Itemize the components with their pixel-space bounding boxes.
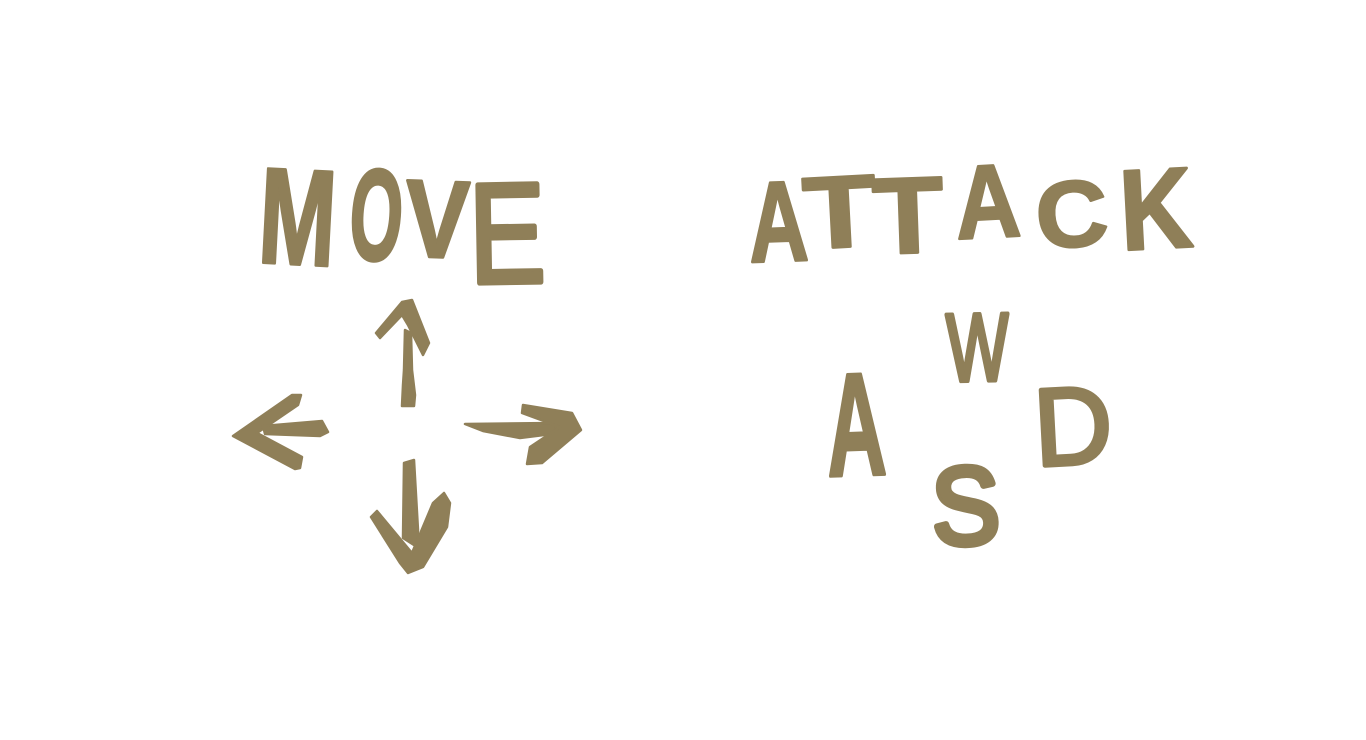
heading: ATTACK: T (871, 154, 946, 277)
heading: ATTACK: A (952, 142, 1023, 261)
heading: MOVE: E (468, 154, 547, 314)
key label: D: D (1031, 363, 1115, 490)
heading: MOVE (255, 139, 547, 314)
icon: down arrow (371, 460, 450, 573)
heading: MOVE: V (403, 157, 472, 282)
key label: S: S (930, 444, 1002, 569)
icon: up arrow (376, 300, 429, 406)
heading: ATTACK (746, 142, 1195, 287)
key label: A: A (823, 343, 888, 508)
heading: ATTACK: C (1032, 159, 1111, 269)
key label: W: W (945, 294, 1010, 402)
heading: MOVE: O (345, 140, 408, 289)
heading: ATTACK: K (1117, 143, 1195, 274)
heading: MOVE: M (255, 139, 340, 295)
icon: left arrow (233, 395, 328, 469)
icon: right arrow (465, 405, 581, 464)
heading: ATTACK: T (800, 153, 879, 271)
heading: ATTACK: A (746, 158, 810, 287)
